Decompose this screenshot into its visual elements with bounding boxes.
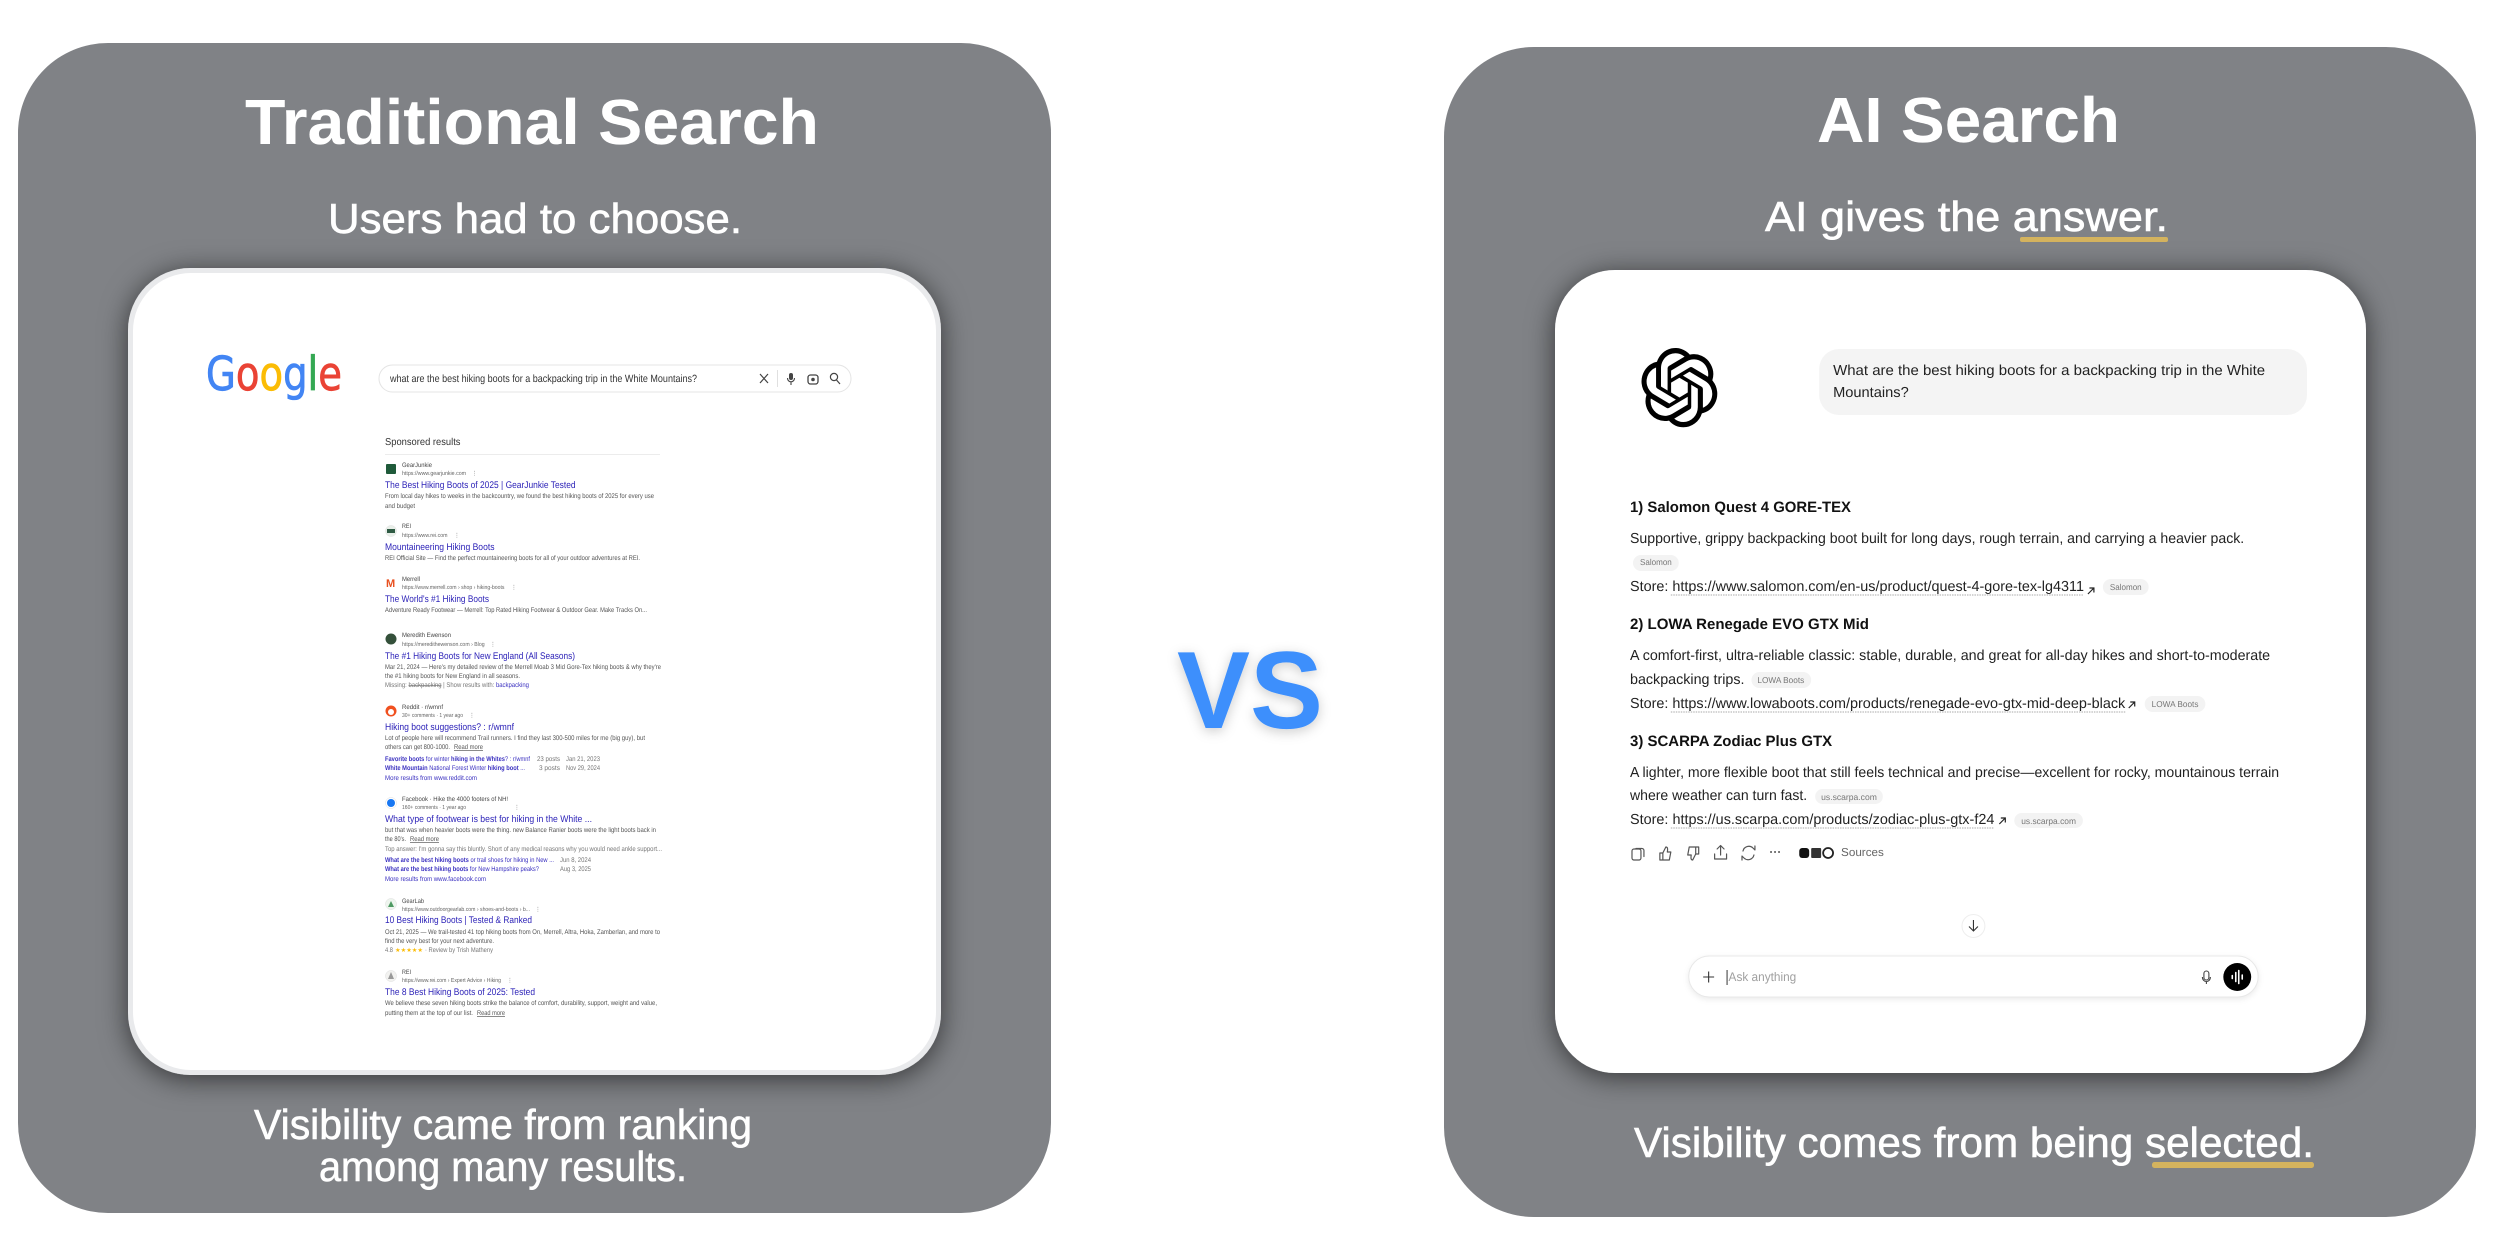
result: meredith ewenson: https://meredithewenson.com › Blog: [402, 641, 485, 648]
chat content: [1629, 349, 2307, 997]
icon: openai logo: [1642, 348, 1717, 427]
result: rei tested: [385, 969, 657, 1017]
answer 1: salomon: [1630, 499, 2244, 595]
result: facebook: More results from www.facebook.com: [385, 876, 486, 883]
result: reddit: 23 posts: [537, 756, 561, 763]
result: meredith ewenson: the #1 hiking boots for New England in all seasons.: [385, 673, 520, 680]
action icons row: [1632, 845, 1884, 860]
result: rei tested: REI: [402, 969, 411, 976]
answer 1: salomon: Supportive, grippy backpacking boot built for long days, rough terrain, and carrying a heavier pack.: [1630, 531, 2244, 547]
result: rei tested: putting them at the top of our list.: [385, 1010, 473, 1017]
result: rei mountaineering: Mountaineering Hiking Boots: [385, 542, 495, 553]
result: gearlab: · Review by Trish Matheny: [425, 947, 493, 954]
subtitle: users had to choose: Users had to choose.: [328, 195, 742, 242]
chat input bar: [1689, 956, 2258, 997]
caption: visibility came from ranking: Visibility came from ranking: [254, 1101, 752, 1148]
answer 3: scarpa: us.scarpa.com: [2021, 816, 2076, 826]
answer 1: salomon: 1) Salomon Quest 4 GORE-TEX: [1630, 499, 1851, 516]
subtitle: ai gives the answer: AI gives the answer.: [1765, 193, 2168, 240]
result: reddit: Favorite boots for winter hiking in the Whites? : r/wmnf: [385, 756, 530, 763]
answer 3: scarpa: [1629, 733, 2279, 828]
result: facebook: the 80's.: [385, 836, 406, 843]
result: rei tested: We believe these seven hiking boots strike the balance of comfort, durability, support, weight and value,: [385, 1000, 657, 1007]
result: facebook: Jun 8, 2024: [560, 857, 591, 864]
result: gearlab: 4.8: [385, 947, 393, 954]
result: gearlab: ★★★★★: [395, 947, 423, 954]
answer 2: lowa: A comfort-first, ultra-reliable classic: stable, durable, and great for all-day hikes and short-to-moderate: [1630, 648, 2270, 664]
search bar: [379, 365, 851, 392]
result: merrell: [385, 576, 647, 614]
result: meredith ewenson: Meredith Ewenson: [402, 632, 451, 639]
result: reddit: Nov 29, 2024: [566, 765, 600, 772]
result: reddit: Lot of people here will recommend Trail runners. I find they last 300-500 miles for me (big guy), but: [385, 735, 645, 742]
result: gearjunkie: [385, 462, 654, 510]
answer 1: salomon: Salomon: [2110, 582, 2142, 592]
vs label: VS: [1177, 629, 1323, 752]
result: gearjunkie: and budget: [385, 503, 415, 510]
result: reddit: Read more: [454, 744, 483, 751]
result: merrell: Merrell: [402, 576, 420, 583]
result: gearjunkie: The Best Hiking Boots of 2025 | GearJunkie Tested: [385, 480, 576, 491]
result: meredith ewenson: Mar 21, 2024 — Here's my detailed review of the Merrell Moab 3 Mid Gore-Tex hiking boots & why they're: [385, 664, 661, 671]
card: chatgpt answer screenshot: [1555, 270, 2366, 1073]
result: facebook: What are the best hiking boots or trail shoes for hiking in New ...: [385, 857, 554, 864]
result: reddit: More results from www.reddit.com: [385, 775, 477, 782]
action icons row: Sources: [1841, 847, 1884, 859]
result: reddit: others can get 800-1000.: [385, 744, 450, 751]
answer 1: salomon: Salomon: [1640, 557, 1672, 567]
result: gearlab: Oct 21, 2025 — We trail-tested 41 top hiking boots from On, Merrell, Altra, Hoka, Zamberlan, and more to: [385, 929, 660, 936]
title: ai search: AI Search: [1817, 84, 2120, 156]
answer 3: scarpa: Store: https://us.scarpa.com/products/zodiac-plus-gtx-f24: [1630, 812, 1994, 828]
answer 2: lowa: LOWA Boots: [1757, 675, 1804, 685]
result: rei mountaineering: REI Official Site — Find the perfect mountaineering boots for all of your outdoor adventures at REI.: [385, 555, 640, 562]
title: traditional search: Traditional Search: [245, 86, 819, 158]
answer 2: lowa: [1630, 616, 2270, 712]
result: merrell: Adventure Ready Footwear — Merrell: Top Rated Hiking Footwear & Outdoor Gear. Make Tracks On...: [385, 607, 647, 614]
result: rei tested: ⋮: [507, 977, 513, 984]
result: gearjunkie: From local day hikes to weeks in the backcountry, we found the best hiking boots of 2025 for every use: [385, 493, 654, 500]
result: gearlab: ⋮: [535, 906, 541, 913]
result: meredith ewenson: The #1 Hiking Boots for New England (All Seasons): [385, 651, 575, 662]
result: gearlab: 10 Best Hiking Boots | Tested & Ranked: [385, 915, 532, 926]
question bubble: Mountains?: [1833, 385, 1909, 401]
result: reddit: ⋮: [469, 712, 475, 719]
result: reddit: Jan 21, 2023: [566, 756, 600, 763]
icon: google logo: Google: [206, 347, 342, 402]
answer 3: scarpa: A lighter, more flexible boot that still feels technical and precise—excellent for rocky, mountainous terrain: [1630, 765, 2279, 781]
result: gearlab: find the very best for your next adventure.: [385, 938, 494, 945]
result: rei mountaineering: [385, 523, 640, 562]
result: facebook: Aug 3, 2025: [560, 866, 591, 873]
result: rei mountaineering: https://www.rei.com: [402, 532, 448, 539]
result: merrell: The World's #1 Hiking Boots: [385, 594, 489, 605]
result: gearlab: GearLab: [402, 898, 424, 905]
result: facebook: What type of footwear is best for hiking in the White ...: [385, 814, 592, 825]
result: gearlab: [385, 898, 660, 954]
result: merrell: M: [386, 578, 395, 590]
result: facebook: [385, 796, 662, 883]
answer 2: lowa: Store: https://www.lowaboots.com/products/renegade-evo-gtx-mid-deep-black: [1630, 696, 2126, 712]
answer 3: scarpa: 3) SCARPA Zodiac Plus GTX: [1630, 733, 1832, 750]
result: reddit: 3 posts: [539, 765, 561, 772]
result: gearjunkie: https://www.gearjunkie.com: [402, 470, 466, 477]
question bubble: [1819, 349, 2307, 415]
answer 2: lowa: 2) LOWA Renegade EVO GTX Mid: [1630, 616, 1869, 633]
chat input bar: Ask anything: [1729, 970, 1796, 984]
result: facebook: Read more: [410, 836, 439, 843]
result: facebook: Top answer: I'm gonna say this bluntly. Short of any medical reasons why you would need ankle support...: [385, 846, 662, 853]
result: rei mountaineering: REI: [402, 523, 411, 530]
label: sponsored results: Sponsored results: [385, 437, 460, 448]
panel: traditional search: [18, 43, 1051, 1213]
result: reddit: 30+ comments · 1 year ago: [402, 712, 463, 719]
result: reddit: Reddit · r/wmnf: [402, 704, 443, 711]
result: rei tested: Read more: [477, 1010, 505, 1017]
result: reddit: Hiking boot suggestions? : r/wmnf: [385, 722, 514, 733]
highlight: answer underline: [2020, 237, 2168, 242]
action icons row: ···: [1769, 845, 1781, 859]
result: meredith ewenson: ⋮: [490, 641, 496, 648]
result: facebook: but that was when heavier boots were the thing. new Balance Ranier boots were the light boots back in: [385, 827, 656, 834]
result: rei tested: The 8 Best Hiking Boots of 2025: Tested: [385, 987, 535, 998]
result: facebook: What are the best hiking boots for New Hampshire peaks?: [385, 866, 539, 873]
result: rei tested: https://www.rei.com › Expert Advice › Hiking: [402, 977, 501, 984]
result: meredith ewenson: Missing: backpacking | Show results with: backpacking: [385, 682, 529, 689]
question bubble: What are the best hiking boots for a backpacking trip in the White: [1833, 363, 2265, 379]
answer 1: salomon: Store: https://www.salomon.com/en-us/product/quest-4-gore-tex-lg4311: [1630, 579, 2084, 595]
icon: scroll down arrow: [1962, 914, 1985, 938]
result: facebook: Facebook · Hike the 4000 footers of NH!: [402, 796, 508, 803]
result: merrell: https://www.merrell.com › shop › hiking-boots: [402, 584, 505, 591]
caption: visibility comes from being selected: Visibility comes from being selected.: [1634, 1119, 2314, 1166]
result: gearjunkie: ⋮: [472, 470, 477, 477]
answer 2: lowa: backpacking trips.: [1630, 672, 1744, 688]
highlight: selected underline: [2152, 1162, 2314, 1168]
result: gearlab: https://www.outdoorgearlab.com › shoes-and-boots › b...: [402, 906, 530, 913]
result: reddit: [385, 704, 645, 782]
result: facebook: 160+ comments · 1 year ago: [402, 804, 466, 811]
search bar: what are the best hiking boots for a backpacking trip in the White Mountains?: [389, 373, 697, 385]
answer 2: lowa: LOWA Boots: [2152, 699, 2198, 709]
caption: visibility came from ranking: among many results.: [319, 1143, 687, 1190]
result: gearjunkie: GearJunkie: [402, 462, 432, 469]
answer 3: scarpa: us.scarpa.com: [1821, 792, 1877, 802]
result: meredith ewenson: [385, 632, 661, 689]
card: google results screenshot: [128, 268, 941, 1075]
result: rei mountaineering: ⋮: [454, 532, 460, 539]
result: reddit: White Mountain National Forest Winter hiking boot ...: [385, 765, 525, 772]
caption: visibility came from ranking: [254, 1101, 752, 1190]
result: facebook: ⋮: [514, 804, 520, 811]
result: merrell: ⋮: [511, 584, 517, 591]
panel: ai search: [1444, 47, 2476, 1217]
answer 3: scarpa: where weather can turn fast.: [1629, 788, 1807, 804]
